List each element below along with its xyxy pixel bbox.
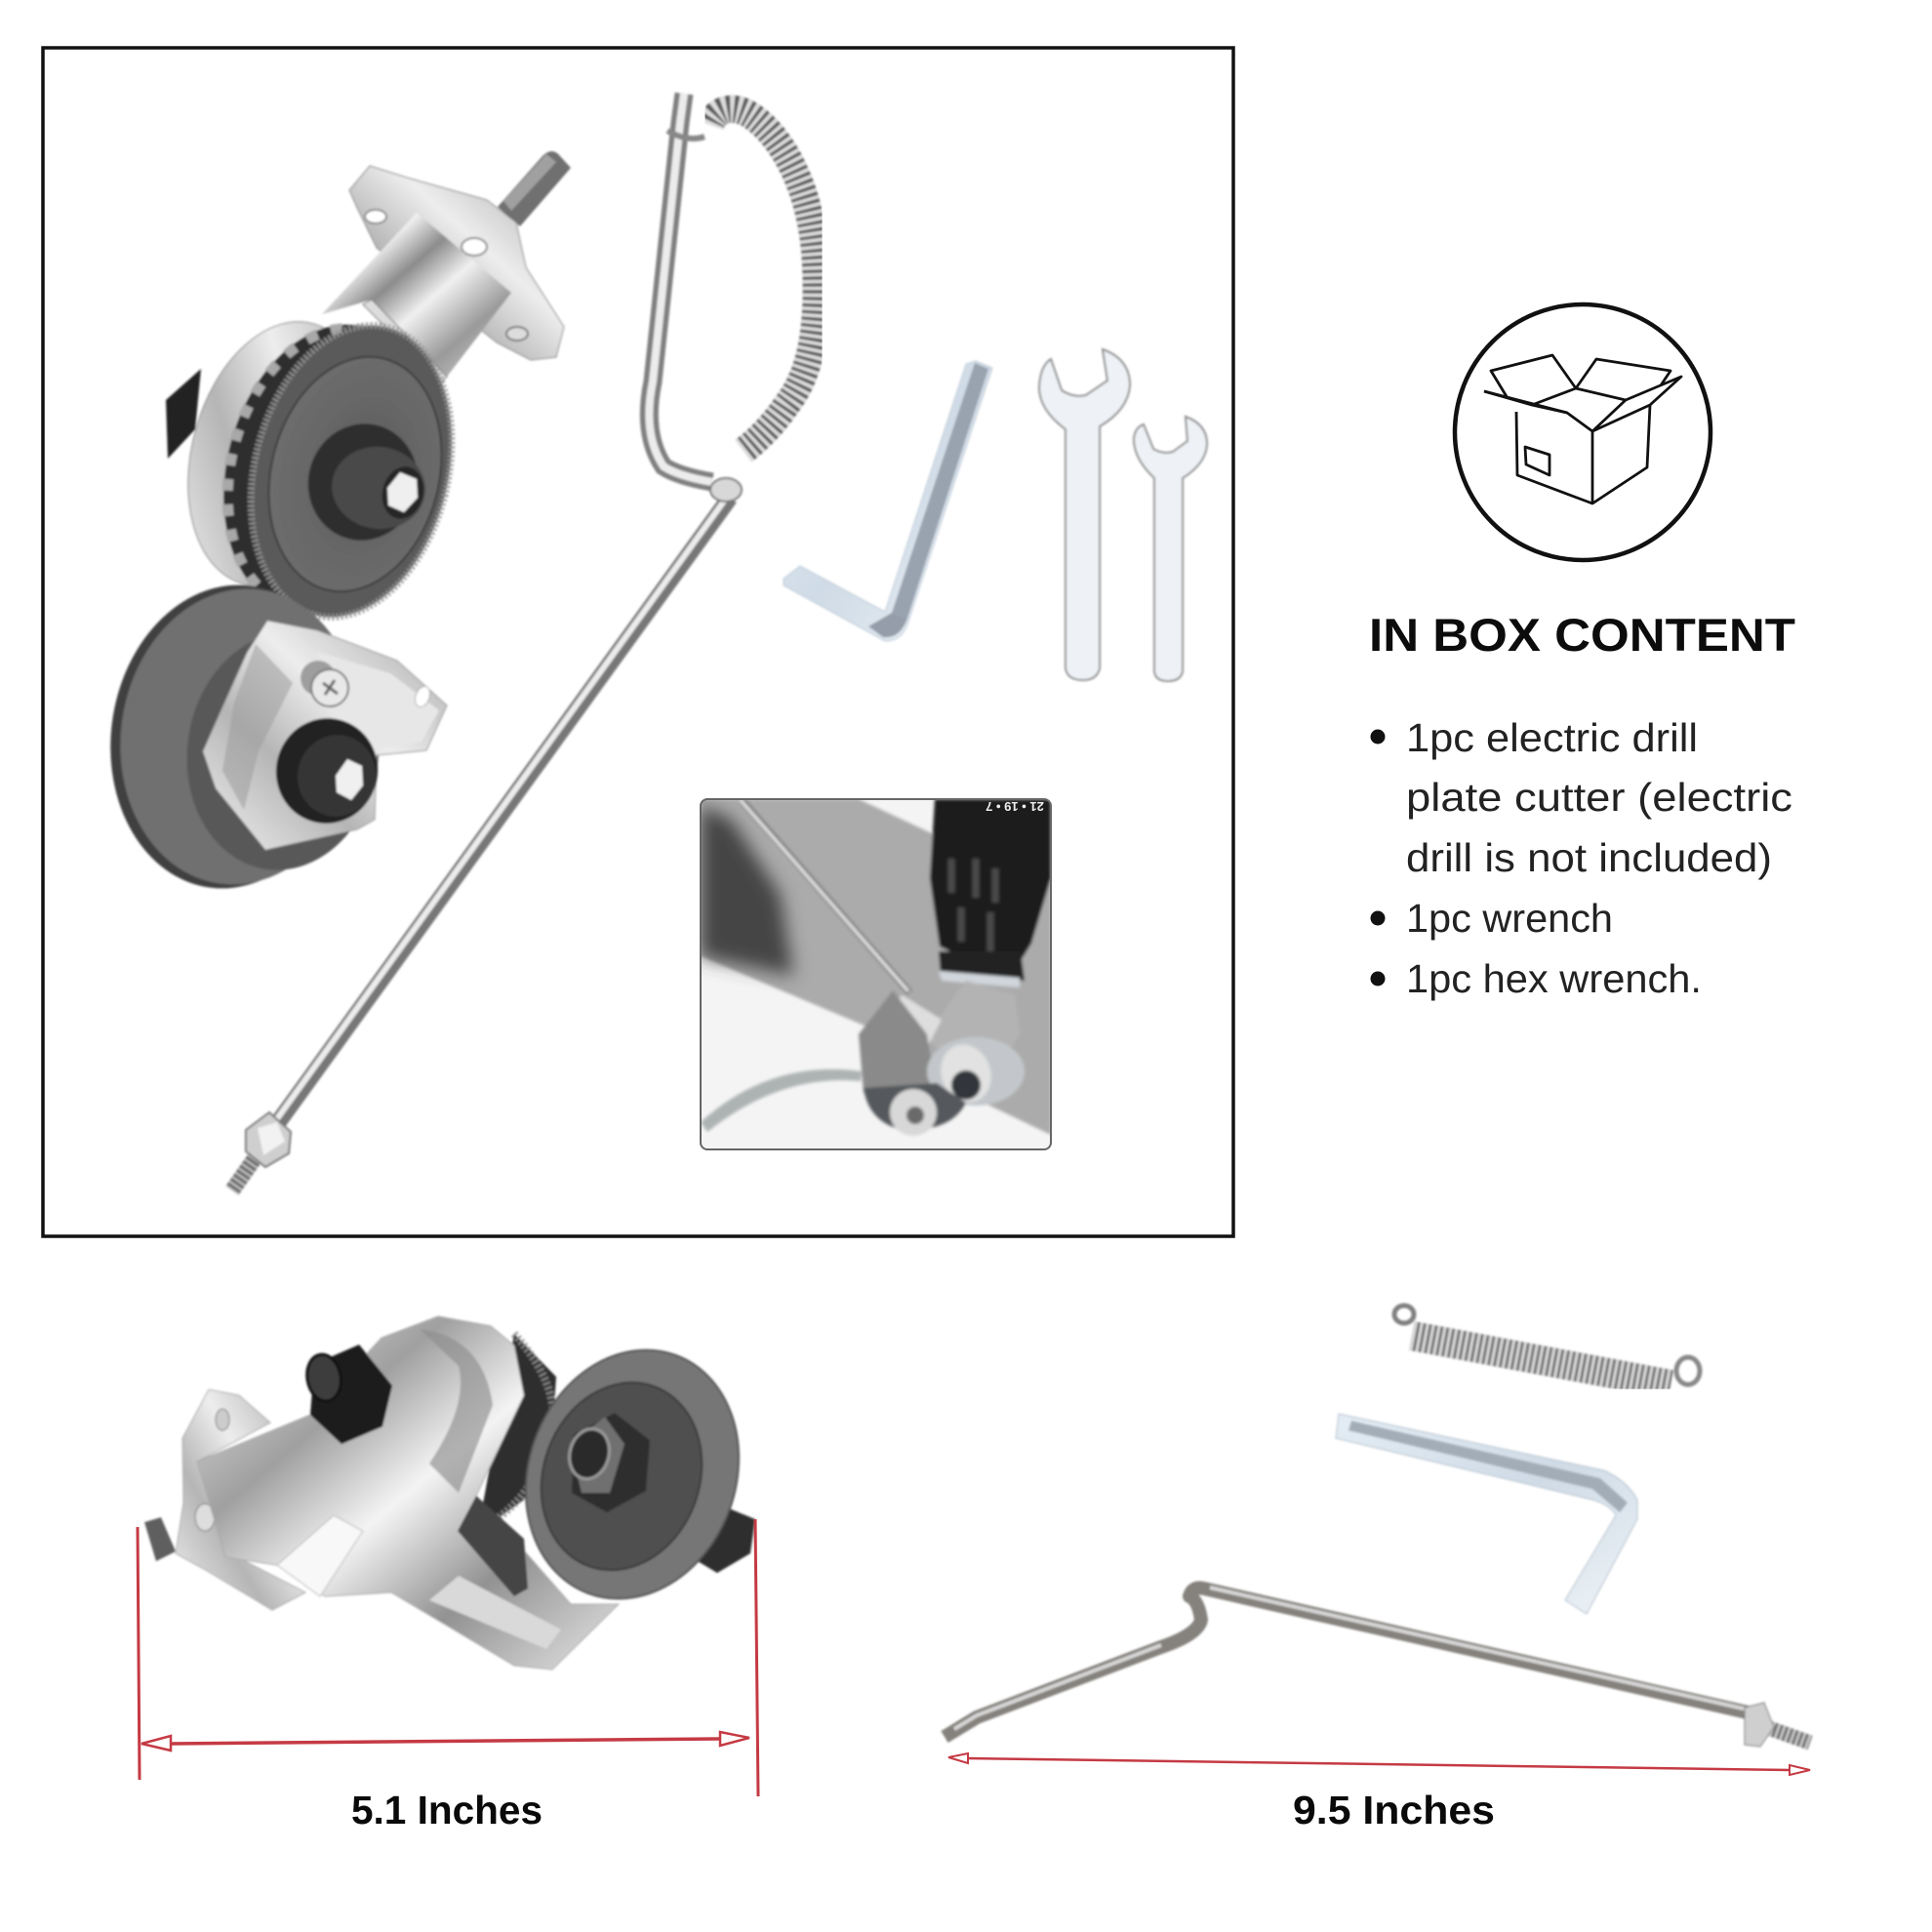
- illustration: cutter side view: [144, 1316, 773, 1670]
- bracket: [203, 621, 447, 850]
- shank: [498, 151, 571, 226]
- silver housing: [160, 302, 396, 606]
- rear knurl: [698, 1508, 755, 1573]
- toothed ring: [193, 302, 461, 635]
- text block: box contents list: 1pc hex wrench.: [1406, 956, 1702, 1001]
- disc nut: [572, 1413, 650, 1512]
- text block: box contents list: 1pc electric drill: [1406, 715, 1698, 760]
- illustration: small wrench: [1134, 417, 1207, 681]
- knurled disc: [221, 304, 481, 638]
- top nut: [310, 1345, 392, 1444]
- text block: box contents list: [1370, 715, 1792, 1001]
- dimension: 5.1 inches: [138, 1519, 758, 1796]
- flange: [349, 166, 564, 360]
- socket bolt upper: [296, 412, 430, 552]
- heading: in box content: IN BOX CONTENT: [1369, 609, 1795, 661]
- text block: box contents list: drill is not included): [1406, 835, 1772, 880]
- illustration: loose hex key: [1336, 1414, 1637, 1614]
- icon: open box in circle: [1455, 304, 1711, 560]
- flange: [176, 1389, 305, 1610]
- illustration: bent rod with nut: [232, 94, 742, 1190]
- disc: [492, 1320, 773, 1629]
- rear bolt: [166, 369, 201, 459]
- text block: box contents list: 1pc wrench: [1406, 896, 1613, 941]
- screw: [301, 661, 336, 696]
- gear teeth: [483, 1334, 556, 1523]
- socket bolt lower: [264, 707, 389, 834]
- illustration: large wrench: [1039, 349, 1130, 680]
- inset: drill torque numbers: 21 • 19 • 7: [986, 799, 1044, 814]
- panel: product contents frame: [43, 48, 1233, 1236]
- lower wheel: [91, 570, 370, 904]
- illustration: loose spring: [1394, 1306, 1700, 1385]
- cylinder body: [322, 213, 511, 377]
- text block: box contents list: plate cutter (electric: [1406, 775, 1792, 820]
- label: 9.5 inches: 9.5 Inches: [1293, 1788, 1495, 1832]
- illustration: bent rod side view: [945, 1588, 1810, 1747]
- dimension: 9.5 inches: [948, 1753, 1810, 1775]
- illustration: main plate cutter: [91, 151, 571, 904]
- main body: [197, 1316, 619, 1670]
- illustration: spring: [710, 109, 817, 451]
- inset photo: cutter in use: [701, 799, 1051, 1149]
- label: 5.1 inches: 5.1 Inches: [351, 1788, 543, 1832]
- illustration: hex key: [784, 361, 992, 641]
